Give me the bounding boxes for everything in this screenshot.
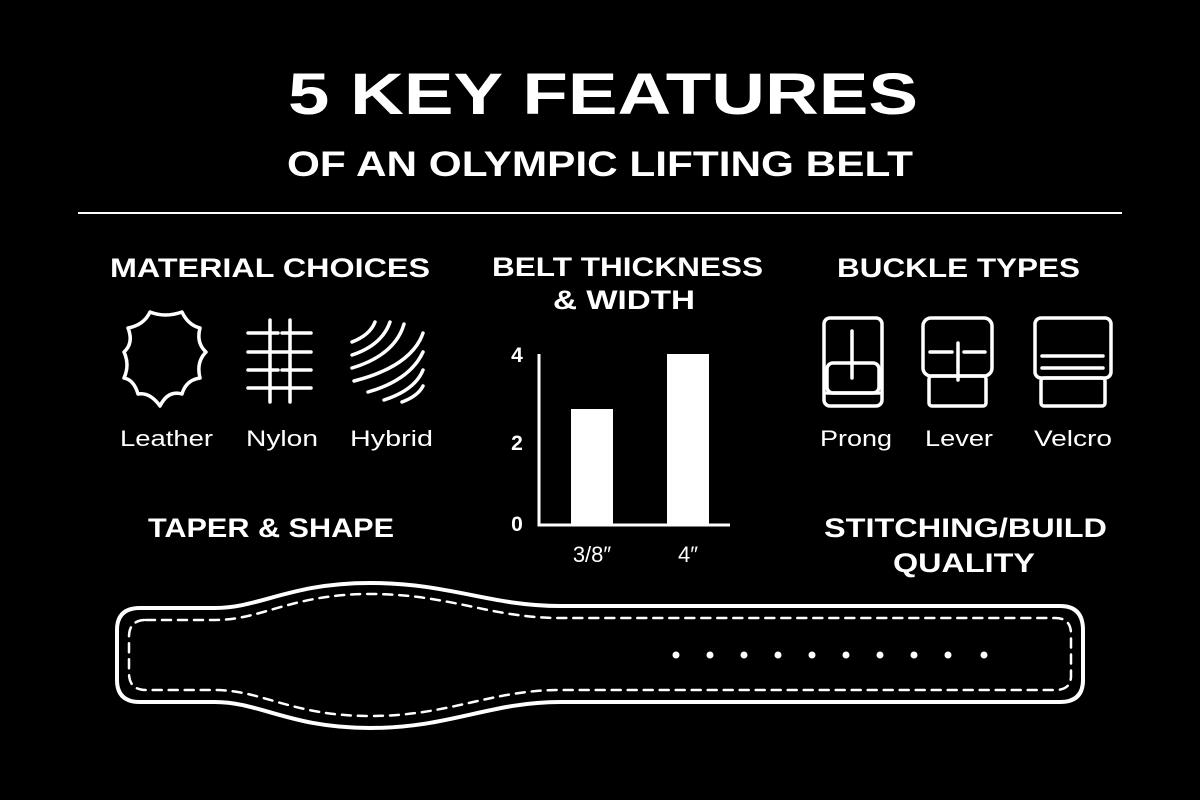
belt illustration	[117, 583, 1083, 728]
bar chart: 2	[511, 432, 523, 455]
icon: lever buckle	[923, 318, 992, 406]
title	[287, 62, 918, 184]
panel: buckle types	[820, 253, 1112, 451]
heading: thickness: & WIDTH	[553, 285, 695, 315]
bar chart	[511, 344, 730, 567]
heading: buckle types: BUCKLE TYPES	[837, 253, 1080, 283]
labels: buckles: Prong	[820, 426, 892, 451]
bar chart: 4	[511, 344, 523, 367]
icon: velcro buckle	[1035, 318, 1111, 406]
heading: taper & shape: TAPER & SHAPE	[148, 513, 394, 543]
labels: materials	[120, 426, 433, 451]
belt holes	[672, 652, 988, 658]
heading: stitching/build quality: QUALITY	[893, 548, 1035, 578]
labels: materials: Leather	[120, 426, 213, 451]
bar chart: 0	[511, 513, 523, 536]
labels: materials: Hybrid	[350, 426, 433, 451]
title: OF AN OLYMPIC LIFTING BELT	[287, 145, 913, 184]
panel: material choices	[110, 253, 433, 451]
icon: prong buckle	[824, 318, 882, 406]
labels: materials: Nylon	[246, 426, 318, 451]
labels: buckles: Velcro	[1034, 426, 1112, 451]
heading: stitching/build quality	[824, 513, 1107, 578]
title: 5 KEY FEATURES	[288, 62, 918, 127]
heading: material choices: MATERIAL CHOICES	[110, 253, 430, 283]
icon: nylon weave	[248, 320, 311, 402]
bar chart: 3/8″	[573, 542, 611, 567]
labels: buckles: Lever	[925, 426, 993, 451]
panel: thickness & width chart	[492, 252, 763, 567]
heading: stitching/build quality: STITCHING/BUILD	[824, 513, 1107, 543]
bar chart: 4″	[678, 542, 698, 567]
icon: hybrid fibers	[352, 322, 423, 402]
heading: thickness	[492, 252, 763, 315]
icon: leather hide	[124, 312, 206, 406]
labels: buckles	[820, 426, 1112, 451]
heading: thickness: BELT THICKNESS	[492, 252, 763, 282]
